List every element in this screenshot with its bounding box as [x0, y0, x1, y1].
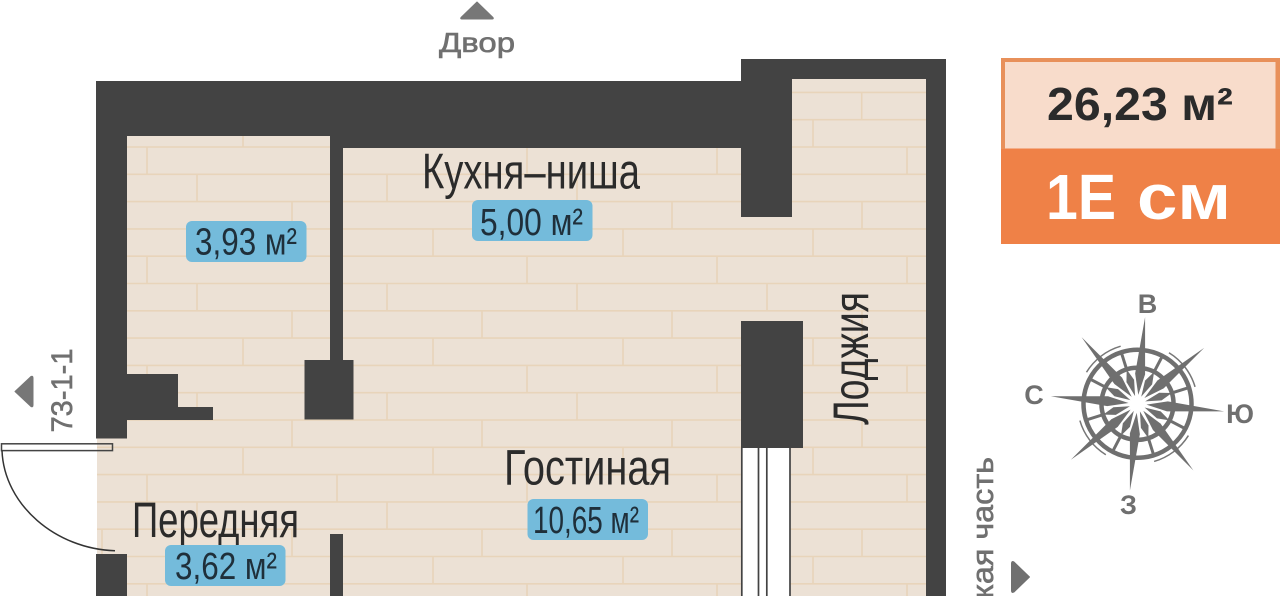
- floor: brick-patterned laminate: [97, 77, 928, 596]
- room label: Кухня-ниша: Кухня–ниша: [422, 144, 640, 200]
- compass label: Ю: Ю: [1226, 399, 1254, 429]
- compass rose: [1024, 289, 1254, 520]
- label: Двор: Двор: [439, 27, 515, 58]
- direction: кая часть: [965, 457, 1030, 596]
- room label: Гостиная: Гостиная: [504, 440, 671, 496]
- entrance door: [2, 444, 115, 551]
- apartment type: [1046, 161, 1231, 233]
- area badge: 3,62: 3,62 м²: [175, 546, 277, 588]
- direction: Двор: [439, 2, 515, 58]
- area badge: 3,93 room: 3,93 м²: [195, 222, 297, 264]
- floor plan: [2, 59, 946, 596]
- label: кая часть: кая часть: [965, 457, 1000, 596]
- room label: Передняя: Передняя: [132, 492, 299, 548]
- room label: Лоджия: Лоджия: [823, 292, 879, 425]
- area badge: 5,00: 5,00 м²: [480, 202, 583, 244]
- compass label: С: С: [1024, 380, 1044, 410]
- total area: 26,23 м²: [1047, 78, 1233, 130]
- info box: area and type: [1001, 58, 1280, 244]
- room label: Гостиная: [504, 440, 671, 542]
- compass label: В: В: [1138, 289, 1157, 319]
- apartment type: 1Е: [1046, 161, 1116, 233]
- compass drawing: [1043, 310, 1232, 498]
- room label: Передняя: [132, 492, 299, 588]
- room label: Кухня-ниша: [422, 144, 640, 244]
- walls: [96, 59, 946, 596]
- icon: arrow left: [15, 376, 33, 407]
- direction: 73-1-1: [15, 348, 79, 432]
- label: 73-1-1: 73-1-1: [46, 348, 79, 432]
- window: [742, 448, 790, 596]
- icon: arrow right: [1012, 562, 1030, 592]
- icon: arrow up: [461, 2, 493, 19]
- compass label: З: З: [1120, 490, 1137, 520]
- apartment type: см: [1137, 161, 1231, 233]
- area badge: 10,65: 10,65 м²: [533, 500, 639, 542]
